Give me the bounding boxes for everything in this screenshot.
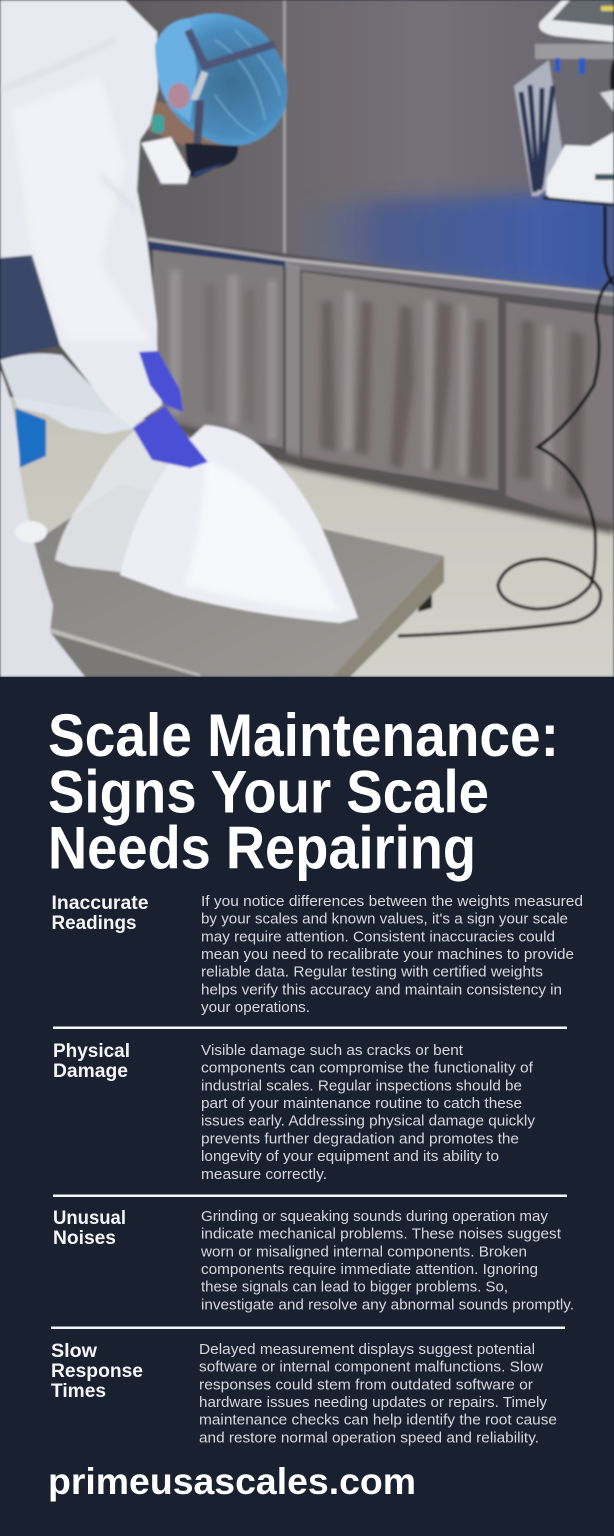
gloves (133, 351, 208, 468)
wall: lower filter vents with metal frame (0, 236, 614, 540)
photo: technician weighing a white bag on an industrial floor scale (0, 0, 614, 677)
heading: physical damage: Damage (53, 1060, 128, 1082)
text: physical damage description: components can compromise the functionality of (201, 1061, 534, 1077)
mask strap (152, 115, 164, 133)
title (48, 702, 559, 882)
text: physical damage description: part of your maintenance routine to catch these (201, 1096, 522, 1112)
heading: physical damage: Physical (53, 1040, 130, 1062)
metal shelf (535, 44, 614, 59)
panel: slow response times (51, 1340, 557, 1446)
navy background behind technician (0, 252, 60, 360)
blue crate (15, 408, 46, 468)
text: unusual noises description: worn or misaligned internal components. Broken (200, 1244, 527, 1260)
white printer unit (546, 132, 614, 203)
title: Scale Maintenance: (48, 702, 559, 769)
hair net (155, 14, 287, 146)
goggle strap (188, 30, 275, 66)
heading: unusual noises: Noises (53, 1227, 116, 1249)
text: physical damage description: measure correctly. (201, 1167, 327, 1183)
text: inaccurate readings description: If you notice differences between the weights measured (201, 894, 583, 910)
text: unusual noises description: these signals can lead to bigger problems. So, (201, 1280, 508, 1296)
text: slow response times description: responses could stem from outdated software or (199, 1377, 533, 1393)
technician (0, 0, 287, 677)
text: slow response times description (199, 1342, 557, 1446)
text: inaccurate readings description: helps verify this accuracy and maintain consistency in (201, 982, 562, 998)
heading: inaccurate readings (52, 892, 149, 934)
text: physical damage description: industrial scales. Regular inspections should be (201, 1078, 522, 1094)
title: Needs Repairing (48, 814, 476, 882)
text: unusual noises description (200, 1209, 574, 1313)
text: unusual noises description: indicate mechanical problems. These noises suggest (201, 1227, 561, 1243)
heading: inaccurate readings: Inaccurate (52, 892, 149, 914)
plastic pouch with cables (514, 60, 563, 196)
text: inaccurate readings description: by your scales and known values, it's a sign your scale (201, 912, 568, 928)
heading: unusual noises (53, 1207, 126, 1249)
title: Signs Your Scale (48, 758, 489, 826)
floor (0, 395, 614, 677)
text: inaccurate readings description: reliable data. Regular testing with certified weights (201, 965, 543, 981)
text: physical damage description (201, 1043, 536, 1183)
goggle buckle and side strap (194, 72, 205, 100)
wall: stainless steel upper panels (124, 0, 614, 298)
heading: slow response times: Response (51, 1360, 143, 1382)
text: slow response times description: Delayed measurement displays suggest potential (199, 1342, 535, 1358)
neck and skin (148, 100, 224, 146)
text: inaccurate readings description (201, 894, 583, 1016)
heading: inaccurate readings: Readings (52, 912, 137, 934)
weighing terminal (539, 0, 614, 42)
heading: slow response times: Slow (51, 1340, 98, 1362)
panel: inaccurate readings (52, 892, 583, 1016)
panel: physical damage (53, 1040, 536, 1183)
text: physical damage description: Visible damage such as cracks or bent (201, 1043, 463, 1059)
scale: stainless weighing platform (34, 518, 445, 677)
text: slow response times description: software or internal component malfunctions. Slow (199, 1360, 543, 1376)
text: slow response times description: hardware issues needing updates or repairs. Timely (199, 1395, 548, 1411)
text: unusual noises description: components require immediate attention. Ignoring (201, 1262, 538, 1278)
footer: website: primeusascales.com (48, 1461, 416, 1502)
right side equipment (514, 0, 614, 205)
text: physical damage description: prevents further degradation and promotes the (201, 1131, 519, 1147)
text: slow response times description: maintenance checks can help identify the root cause (199, 1413, 557, 1429)
heading: slow response times (51, 1340, 143, 1402)
text: inaccurate readings description: your operations. (201, 1000, 310, 1016)
text: unusual noises description: investigate and resolve any abnormal sounds promptly. (201, 1297, 574, 1313)
text: physical damage description: longevity of your equipment and its ability to (201, 1149, 499, 1165)
white bag on scale (120, 425, 358, 623)
heading: unusual noises: Unusual (53, 1207, 126, 1229)
text: unusual noises description: Grinding or squeaking sounds during operation may (201, 1209, 549, 1225)
heading: slow response times: Times (51, 1380, 106, 1402)
text: inaccurate readings description: may require attention. Consistent inaccuracies could (201, 929, 555, 945)
white coverall torso and arm (0, 0, 162, 427)
clear plastic sheet (0, 353, 138, 434)
boot cover (15, 521, 47, 543)
clear plastic bag top (54, 430, 191, 574)
face mask (185, 143, 238, 178)
text: inaccurate readings description: mean you need to recalibrate your machines to provide (201, 947, 574, 963)
text: slow response times description: and restore normal operation speed and reliability. (199, 1430, 539, 1446)
white respirator unit (141, 137, 190, 184)
legs in white coverall (0, 370, 85, 677)
panel: unusual noises (53, 1207, 574, 1313)
heading: physical damage (53, 1040, 130, 1082)
text: physical damage description: issues early. Addressing physical damage quickly (201, 1114, 536, 1130)
black power cable (398, 206, 614, 636)
ear (168, 83, 190, 109)
